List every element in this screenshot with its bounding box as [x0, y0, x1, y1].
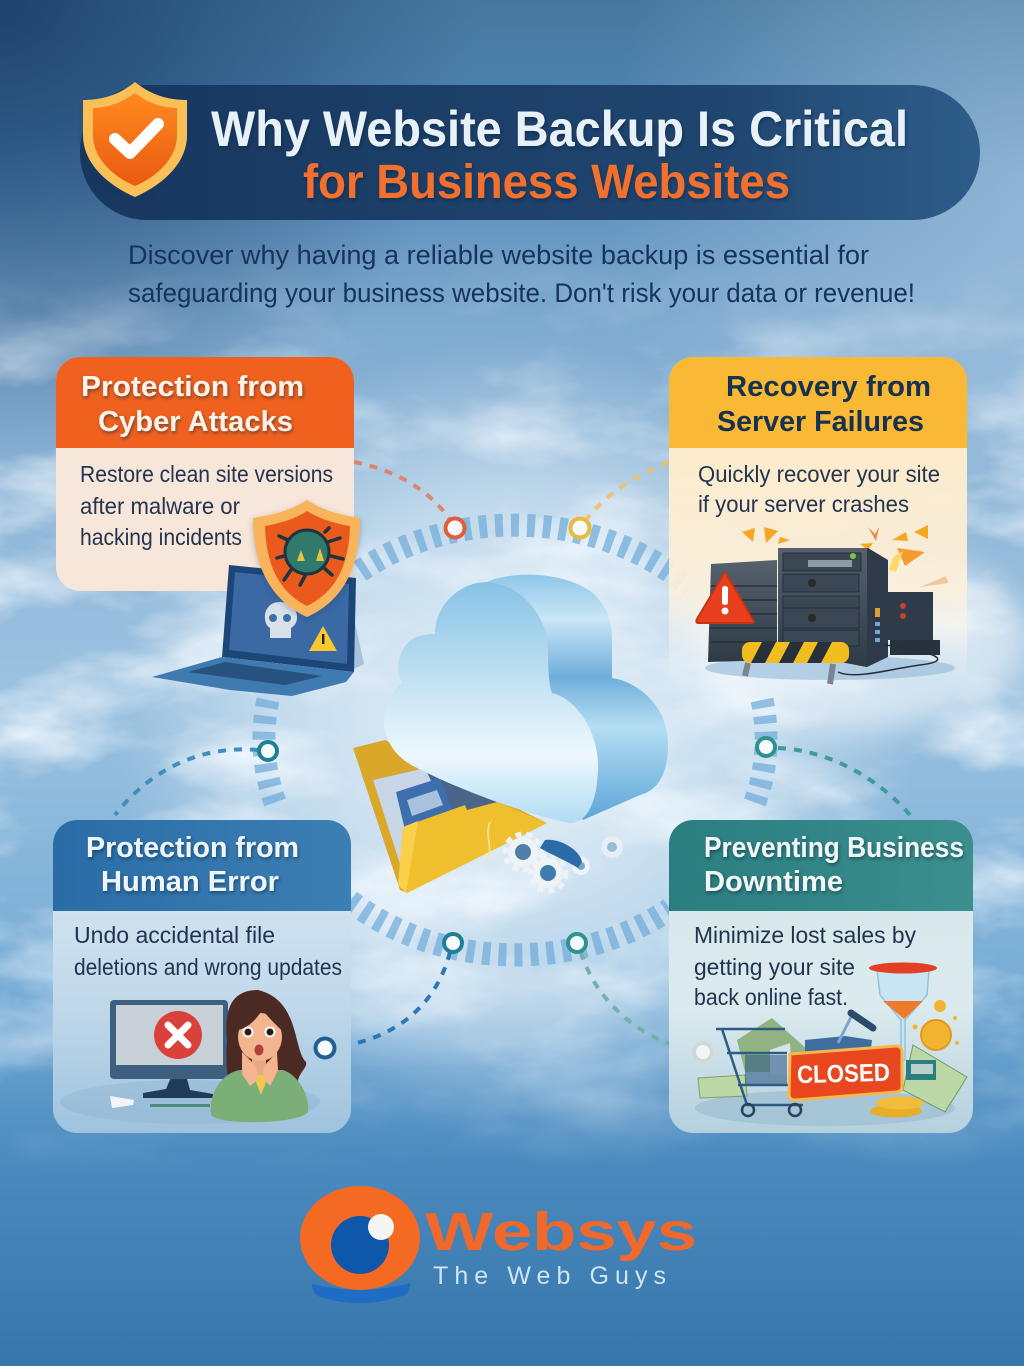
panel: business downtime — [669, 820, 973, 1133]
cloud side — [487, 575, 668, 820]
card body — [669, 448, 967, 680]
sign: closed: CLOSED — [797, 1059, 890, 1089]
node markers — [259, 518, 775, 952]
card title: Cyber Attacks — [98, 406, 293, 438]
sparks — [742, 525, 948, 587]
card title — [86, 832, 299, 898]
cloud and folder illustration — [353, 575, 668, 893]
barrier — [745, 663, 833, 684]
card title: Human Error — [101, 866, 279, 898]
card text — [694, 922, 916, 1010]
gears — [505, 834, 623, 891]
header banner — [80, 85, 980, 220]
card text: Quickly recover your site — [698, 461, 940, 487]
icon: crashed servers — [696, 525, 955, 684]
box right — [888, 592, 933, 640]
folder back — [353, 740, 547, 893]
icon: coins and money — [698, 1000, 967, 1118]
folder front — [398, 802, 547, 893]
card text — [80, 461, 333, 550]
panel: cyber attacks — [56, 357, 354, 591]
warning triangle — [696, 572, 754, 623]
card text: Minimize lost sales by — [694, 922, 916, 948]
card text: Restore clean site versions — [80, 461, 333, 487]
logo mark — [300, 1186, 420, 1303]
node marker — [694, 1043, 712, 1061]
card body — [56, 357, 354, 591]
card text: hacking incidents — [80, 524, 242, 550]
icon: hourglass — [869, 962, 937, 1060]
card title: Recovery from — [726, 371, 931, 403]
title line 2: for Business Websites — [303, 156, 790, 209]
icon: shield with bug — [253, 500, 360, 617]
logo tagline: The Web Guys — [433, 1262, 671, 1290]
card title: Preventing Business — [704, 832, 964, 864]
intro text: safeguarding your business website. Don't risk your data or revenue! — [128, 278, 915, 308]
card header — [669, 820, 973, 911]
card text: Undo accidental file — [74, 922, 275, 948]
sign: closed — [789, 1046, 902, 1100]
logo wordmark: Websys — [425, 1202, 697, 1262]
icon: laptop with skull — [152, 565, 364, 696]
node marker — [316, 1038, 334, 1058]
card text: after malware or — [80, 493, 240, 519]
card header — [53, 820, 351, 911]
intro text: Discover why having a reliable website backup is essential for — [128, 240, 869, 270]
card title — [704, 832, 964, 898]
tower center — [778, 548, 888, 667]
card text: back online fast. — [694, 984, 848, 1010]
card title: Protection from — [81, 371, 304, 403]
card title — [717, 371, 931, 438]
tower left — [708, 560, 777, 662]
icon: monitor with error — [110, 1000, 228, 1108]
card title: Server Failures — [717, 406, 924, 438]
card text: getting your site — [694, 954, 855, 980]
card title — [81, 371, 304, 438]
icon: shield with check — [83, 82, 187, 197]
card text: if your server crashes — [698, 491, 909, 517]
card header — [56, 357, 354, 448]
title line 1: Why Website Backup Is Critical — [211, 101, 908, 157]
connector lines — [115, 462, 910, 1050]
card header — [669, 357, 967, 448]
card body — [53, 820, 351, 1133]
card text: deletions and wrong updates — [74, 954, 342, 980]
icon: shopping cart — [716, 1013, 873, 1116]
panel: server failures — [669, 357, 967, 680]
card text — [74, 922, 342, 980]
card title: Protection from — [86, 832, 299, 864]
card text — [698, 461, 940, 517]
card body — [669, 820, 973, 1133]
intro text — [128, 240, 915, 308]
logo: Websys — [300, 1186, 697, 1303]
icon: worried woman — [211, 990, 308, 1122]
cloud front — [384, 582, 598, 823]
dashed ring around cloud — [264, 525, 766, 955]
panel: human error — [53, 820, 351, 1133]
card title: Downtime — [704, 866, 843, 898]
